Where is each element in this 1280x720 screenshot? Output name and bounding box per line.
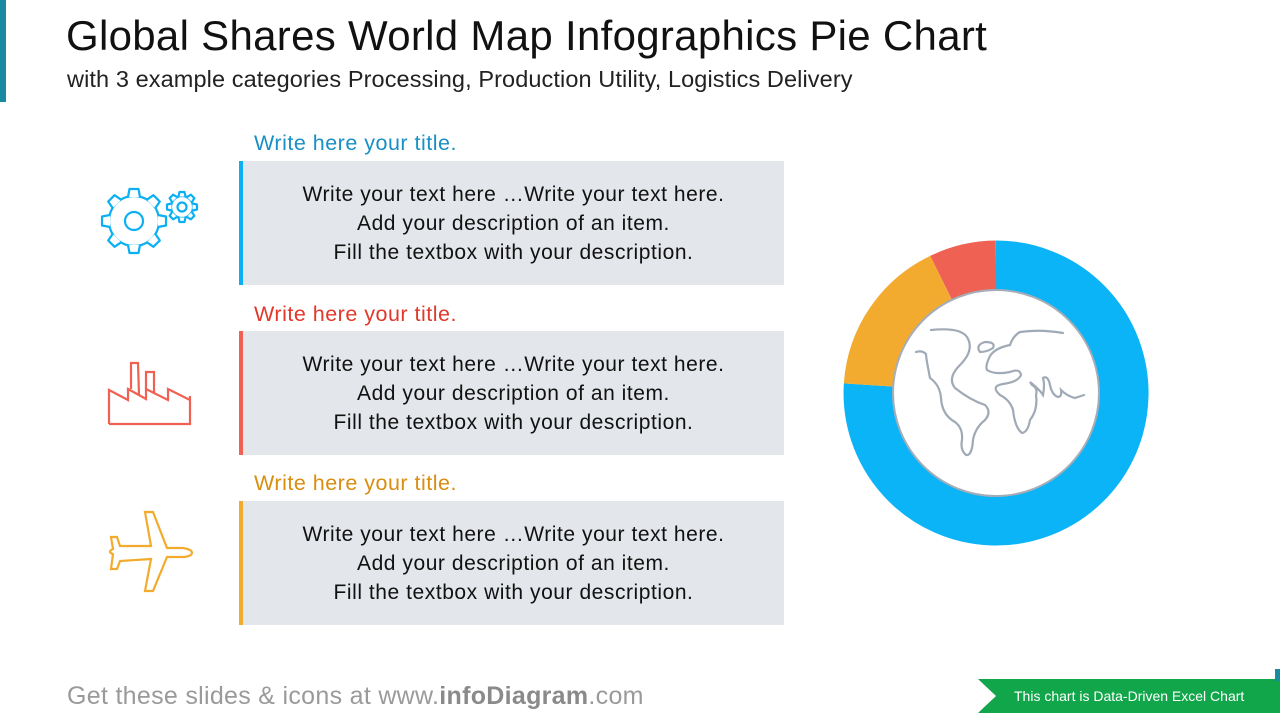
item 3 box: Add your description of an item. <box>357 552 670 574</box>
item 1 title: Write here your title. <box>254 131 457 155</box>
item 1 box: Fill the textbox with your description. <box>334 240 693 264</box>
segment red <box>941 266 996 278</box>
item 3 box <box>239 501 784 625</box>
banner: data-driven <box>978 679 1280 713</box>
icon: plane <box>108 510 194 592</box>
banner: data-driven: This chart is Data-Driven Excel Chart <box>1014 688 1244 704</box>
icon: gears <box>100 188 198 254</box>
item 2 box: Fill the textbox with your description. <box>334 410 693 434</box>
item 2 box <box>239 331 784 455</box>
item 2 box: Write your text here …Write your text here. <box>302 352 724 376</box>
donut chart <box>844 240 1149 546</box>
icon: world map <box>916 329 1084 455</box>
item 3 box: Fill the textbox with your description. <box>334 580 693 604</box>
subtitle: with 3 example categories Processing, Production Utility, Logistics Delivery <box>67 66 853 92</box>
item 3 box: Write your text here …Write your text here. <box>302 522 724 546</box>
icon: factory <box>108 362 192 426</box>
item 3 title: Write here your title. <box>254 471 457 495</box>
footer text: Get these slides & icons at www.infoDiagram.com <box>67 682 644 710</box>
item 1 box: Add your description of an item. <box>357 212 670 234</box>
item 2 title: Write here your title. <box>254 302 457 326</box>
item 1 box <box>239 161 784 285</box>
item 1 box: Write your text here …Write your text here. <box>302 182 724 206</box>
item 2 box: Add your description of an item. <box>357 382 670 404</box>
segment orange <box>869 278 941 385</box>
accent bar <box>0 0 6 102</box>
segment blue <box>869 266 1124 520</box>
title: Global Shares World Map Infographics Pie Chart <box>66 12 987 59</box>
